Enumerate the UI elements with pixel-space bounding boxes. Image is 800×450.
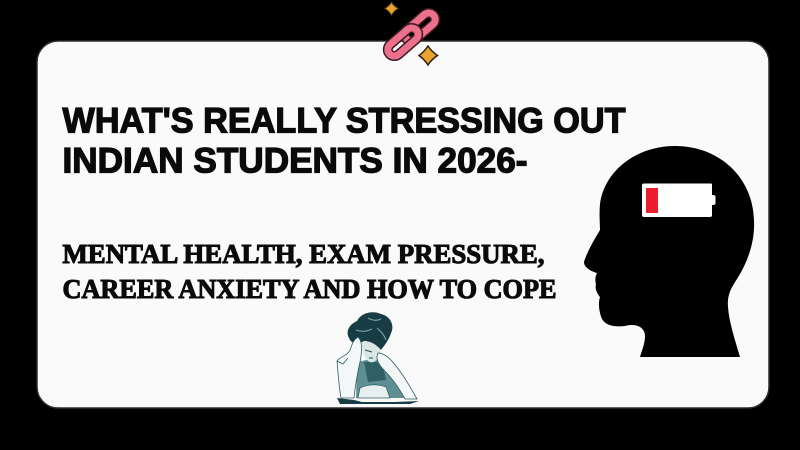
title: INDIAN STUDENTS IN 2026- (62, 142, 528, 180)
panel: main card (37, 41, 769, 408)
battery (642, 184, 716, 217)
left arm (337, 337, 362, 398)
icon: large sparkle (419, 46, 438, 65)
face (362, 341, 381, 362)
icon: small sparkle (384, 2, 398, 16)
table shadow (337, 398, 419, 404)
icon: head silhouette with low battery (584, 146, 754, 357)
title: WHAT'S REALLY STRESSING OUT (62, 102, 626, 140)
subtitle (62, 238, 556, 304)
right arm (377, 353, 417, 399)
subtitle: MENTAL HEALTH, EXAM PRESSURE, (62, 238, 544, 269)
torso (356, 358, 404, 398)
illustration: stressed woman (337, 312, 419, 404)
icon: chain link (385, 10, 438, 59)
subtitle: CAREER ANXIETY AND HOW TO COPE (62, 273, 556, 304)
hair (348, 312, 392, 350)
title (62, 102, 626, 180)
